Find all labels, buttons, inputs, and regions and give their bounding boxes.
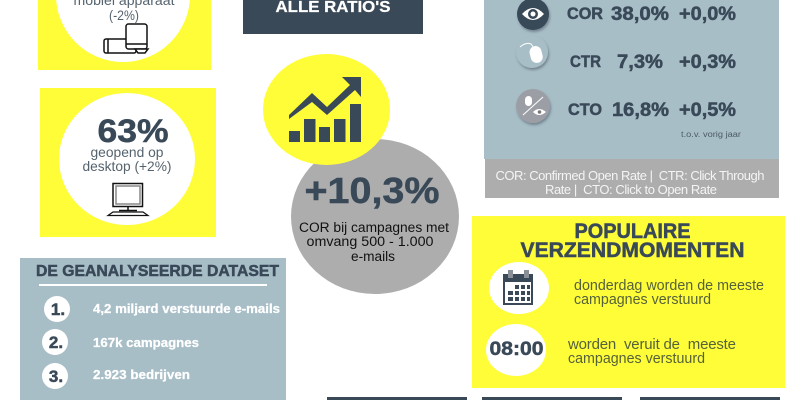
item 2: 167k campagnes [93, 336, 199, 350]
item 3: 2.923 bedrijven [93, 368, 190, 382]
item 3 [42, 363, 190, 389]
growth description: e-mails [351, 249, 395, 264]
desktop text: desktop (+2%) [82, 158, 172, 174]
time text [567, 336, 736, 367]
send moments heading [520, 220, 744, 262]
dataset heading: DE GEANALYSEERDE DATASET [36, 263, 280, 280]
time text: worden veruit de meeste [567, 336, 736, 353]
row: COR: 38,0% [611, 4, 669, 25]
row: CTR: +0,3% [679, 52, 736, 73]
growth number: +10,3% [304, 170, 440, 211]
row: CTO [568, 100, 736, 121]
row: CTO: CTO [568, 100, 602, 119]
icon: mouse [516, 36, 548, 68]
legend: ratio definitions: COR: Confirmed Open Rate | CTR: Click Through [496, 168, 764, 183]
row: CTO: +0,5% [679, 100, 736, 121]
item 1: 1. [51, 300, 65, 319]
panel: desktop share [40, 88, 216, 237]
time text: campagnes verstuurd [568, 350, 705, 367]
panel: mobile share [38, 0, 211, 70]
legend: ratio definitions [485, 159, 779, 198]
icon: click to open [516, 89, 550, 123]
icon: mobile devices [104, 24, 148, 53]
note: vs last year: t.o.v. vorig jaar [681, 130, 741, 139]
panel: popular send moments [472, 216, 785, 388]
legend: ratio definitions: Rate | CTO: Click to Open Rate [545, 182, 717, 197]
mobile text: (-2%) [109, 7, 139, 23]
panel: ratios [484, 0, 779, 159]
growth description: omvang 500 - 1.000 [306, 234, 434, 249]
row: CTR: 7,3% [617, 52, 663, 73]
icon: calendar [489, 262, 549, 314]
item 2: 2. [49, 333, 63, 352]
callout: COR growth [291, 139, 459, 294]
item 1 [44, 296, 280, 322]
growth description: COR bij campagnes met [299, 220, 449, 235]
growth description [299, 220, 449, 264]
send moments heading: POPULAIRE [574, 220, 690, 243]
bottom tab 3 [640, 397, 780, 400]
time badge [486, 324, 546, 376]
banner: alle ratio's [243, 0, 423, 34]
panel: dataset [20, 258, 286, 400]
row: COR: COR [567, 4, 603, 23]
bottom tab 1 [327, 397, 467, 400]
thursday text: donderdag worden de meeste [574, 277, 764, 294]
icon: growth chart [263, 54, 390, 165]
row: CTR: CTR [570, 52, 601, 71]
thursday text: campagnes verstuurd [574, 291, 711, 308]
thursday text [574, 277, 764, 308]
icon: desktop computer [108, 184, 148, 216]
row: COR [567, 4, 736, 25]
row: CTO: 16,8% [612, 100, 669, 121]
item 1: 4,2 miljard verstuurde e-mails [93, 302, 280, 316]
desktop text: geopend op [90, 144, 164, 160]
send moments heading: VERZENDMOMENTEN [520, 239, 744, 262]
item 3: 3. [49, 367, 63, 386]
mobile text [74, 0, 175, 23]
bottom tab 2 [482, 397, 622, 400]
row: COR: +0,0% [679, 4, 736, 25]
row: CTR [570, 52, 736, 73]
desktop percentage: 63% [98, 113, 168, 149]
time badge: 08:00 [490, 339, 544, 360]
desktop text [82, 144, 172, 174]
icon: eye [517, 0, 549, 30]
item 2 [42, 329, 199, 355]
